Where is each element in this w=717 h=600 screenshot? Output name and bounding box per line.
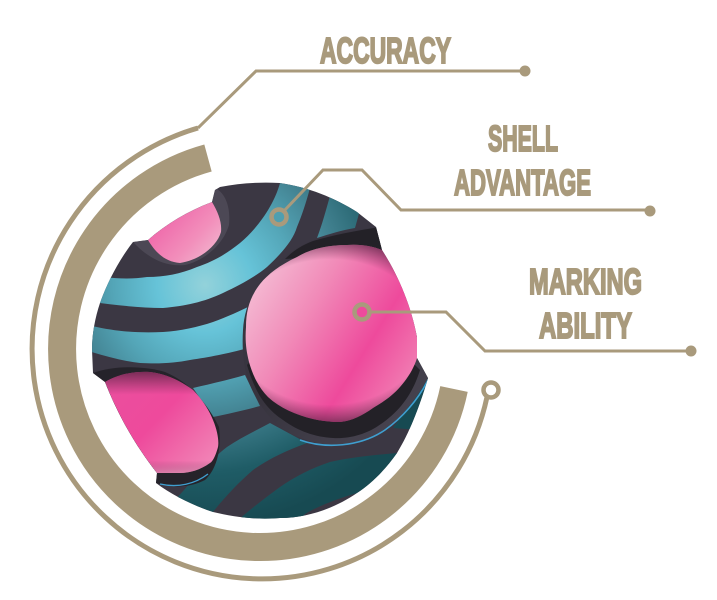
outer thin ring: [32, 128, 487, 579]
leader line: shell: [283, 170, 650, 212]
lower pink: [105, 372, 218, 473]
main blue edge: [300, 380, 428, 445]
ball: [85, 175, 435, 525]
heading: marking: MARKING: [529, 261, 642, 302]
ring: shell: [272, 210, 286, 224]
ring: marking: [354, 304, 370, 320]
callout: accuracy: [198, 30, 530, 128]
main rim: [243, 227, 428, 445]
heading: ability: ABILITY: [539, 305, 632, 346]
lower blue edge: [160, 474, 208, 486]
heading: advantage: ADVANTAGE: [454, 162, 591, 203]
thick gold arc: [62, 158, 454, 547]
dot: accuracy: [520, 66, 530, 76]
main pink shade: [258, 244, 405, 422]
main pink: [246, 245, 417, 422]
callout: marking ability: [354, 261, 696, 356]
leader line: marking: [369, 312, 691, 351]
heading: accuracy: ACCURACY: [320, 30, 451, 71]
dot: shell: [644, 206, 656, 216]
dot: marking: [686, 346, 696, 356]
lower rim: [93, 367, 220, 486]
main rim dark upper: [285, 227, 382, 259]
callout: shell advantage: [272, 118, 656, 224]
main rim dark lower: [247, 362, 420, 438]
heading: shell: SHELL: [488, 118, 558, 159]
top pink: [148, 202, 221, 263]
ring terminal on outer ring: [484, 382, 498, 398]
leader line: accuracy: [198, 71, 525, 128]
lower pink shade: [105, 372, 218, 473]
top rim: [133, 188, 229, 265]
ball dark base: [85, 175, 435, 525]
teal stripes: [88, 183, 430, 522]
